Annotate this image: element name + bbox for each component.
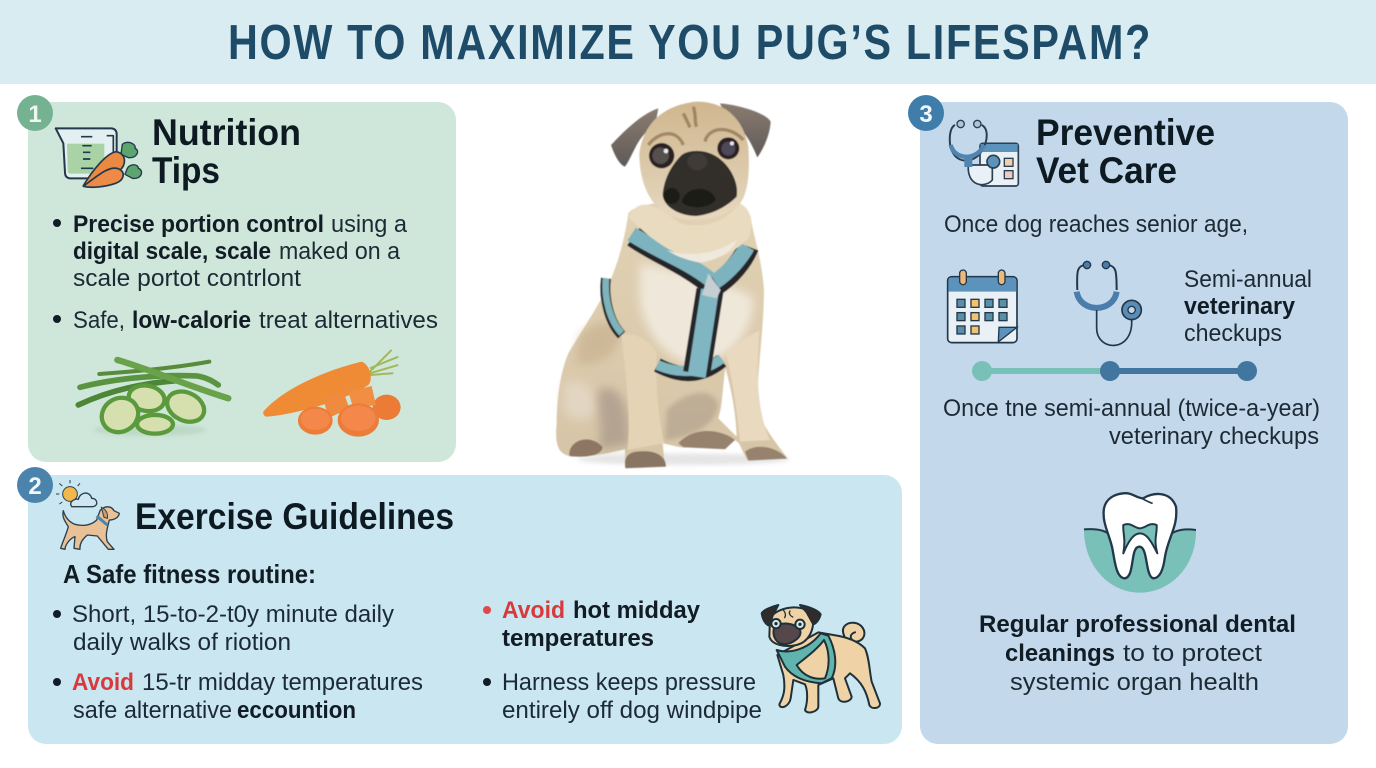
bullet: portion control: using a xyxy=(331,211,408,238)
bullet: low-calorie treats: Safe, xyxy=(73,307,125,334)
illustration: cartoon pug in harness xyxy=(762,605,880,712)
heading: Vet Care xyxy=(1036,150,1177,191)
bullet: short walks: daily walks of riotion xyxy=(73,629,291,656)
wrinkles xyxy=(648,107,743,145)
dental text: cleanings xyxy=(1005,640,1115,667)
subheading: A Safe fitness routine: xyxy=(63,559,316,589)
panel: preventive vet care xyxy=(908,95,1348,744)
dental text xyxy=(979,611,1296,696)
icon: calendar xyxy=(948,270,1017,343)
bullet: avoid midday left: Avoid xyxy=(72,669,134,696)
bullet: portion control: Precise portion control xyxy=(73,211,324,238)
panel: nutrition tips xyxy=(17,95,456,462)
bullet: avoid midday left: 15-tr midday temperatures xyxy=(142,669,423,696)
semi-annual label: veterinary xyxy=(1184,293,1296,320)
icon: stethoscope xyxy=(1077,261,1141,345)
bullet: avoid midday left: eccountion xyxy=(237,697,356,724)
pug body xyxy=(556,201,787,467)
icon: measuring jug and carrots xyxy=(56,128,142,187)
title: HOW TO MAXIMIZE YOU PUG’S LIFESPAM? xyxy=(228,16,1152,70)
timeline caption: Once tne semi-annual (twice-a-year) xyxy=(943,395,1320,422)
bullet: low-calorie treats: low-calorie xyxy=(132,307,251,334)
nose xyxy=(687,153,707,170)
heading: Preventive xyxy=(1036,112,1215,153)
illustration: pug in teal harness xyxy=(556,102,790,468)
bullet: avoid hot midday: hot midday xyxy=(573,597,701,624)
semi-annual label: checkups xyxy=(1184,320,1282,347)
semi-annual label xyxy=(1184,266,1312,347)
bullet: portion control xyxy=(53,211,408,292)
icon: dog walking with sun and cloud xyxy=(56,480,119,549)
heading xyxy=(152,112,301,191)
heading: Tips xyxy=(152,150,220,191)
icon: tooth and gum xyxy=(1084,493,1196,593)
front legs xyxy=(622,334,664,450)
eyes xyxy=(649,143,674,168)
heading: Nutrition xyxy=(152,112,301,153)
badge 2 xyxy=(17,467,53,503)
timeline caption: veterinary checkups xyxy=(1109,423,1319,450)
muzzle xyxy=(663,151,737,216)
bullet: avoid midday left xyxy=(53,669,423,724)
bullet: portion control: digital scale, scale xyxy=(73,238,271,265)
heading xyxy=(1036,112,1215,191)
badge 1 xyxy=(17,95,53,131)
panel: exercise guidelines xyxy=(17,467,902,744)
bullet: avoid hot midday xyxy=(483,597,701,652)
timeline caption xyxy=(943,395,1320,450)
dental text: systemic organ health xyxy=(1010,669,1259,696)
ears xyxy=(611,108,658,167)
dental text: to to protect xyxy=(1123,640,1262,667)
badge 3: 3 xyxy=(919,101,933,128)
head xyxy=(639,102,749,220)
bullet: harness: entirely off dog windpipe xyxy=(502,697,762,724)
bullet: portion control: scale portot contrlont xyxy=(73,265,301,292)
body shading xyxy=(563,263,753,450)
badge 2: 2 xyxy=(28,473,42,500)
gap between belly and right leg xyxy=(718,368,737,437)
intro text: Once dog reaches senior age, xyxy=(944,211,1248,238)
bullet: harness xyxy=(483,669,762,724)
bullet: short walks xyxy=(53,601,394,656)
badge 1: 1 xyxy=(28,101,42,128)
icon: stethoscope and calendar xyxy=(950,120,1018,186)
bullet: harness: Harness keeps pressure xyxy=(502,669,756,696)
illustration: green beans and cucumber xyxy=(78,360,228,439)
harness xyxy=(605,234,748,377)
bullet: low-calorie treats: treat alternatives xyxy=(259,307,438,334)
bullet: short walks: Short, 15-to-2-t0y minute daily xyxy=(72,601,394,628)
bullet: avoid hot midday: Avoid xyxy=(502,597,565,624)
badge 3 xyxy=(908,95,944,131)
timeline xyxy=(972,361,1257,381)
paws xyxy=(625,451,666,468)
illustration: carrot and slices xyxy=(263,350,401,437)
heading: Exercise Guidelines xyxy=(135,496,454,537)
header band xyxy=(0,0,1376,84)
dental text: Regular professional dental xyxy=(979,611,1296,638)
bullet: portion control: maked on a xyxy=(279,238,401,265)
bullet: avoid hot midday: temperatures xyxy=(502,625,654,652)
bullet: low-calorie treats xyxy=(53,307,438,334)
semi-annual label: Semi-annual xyxy=(1184,266,1312,293)
neck ruff xyxy=(628,203,751,262)
bullet: avoid midday left: safe alternative xyxy=(73,697,232,724)
